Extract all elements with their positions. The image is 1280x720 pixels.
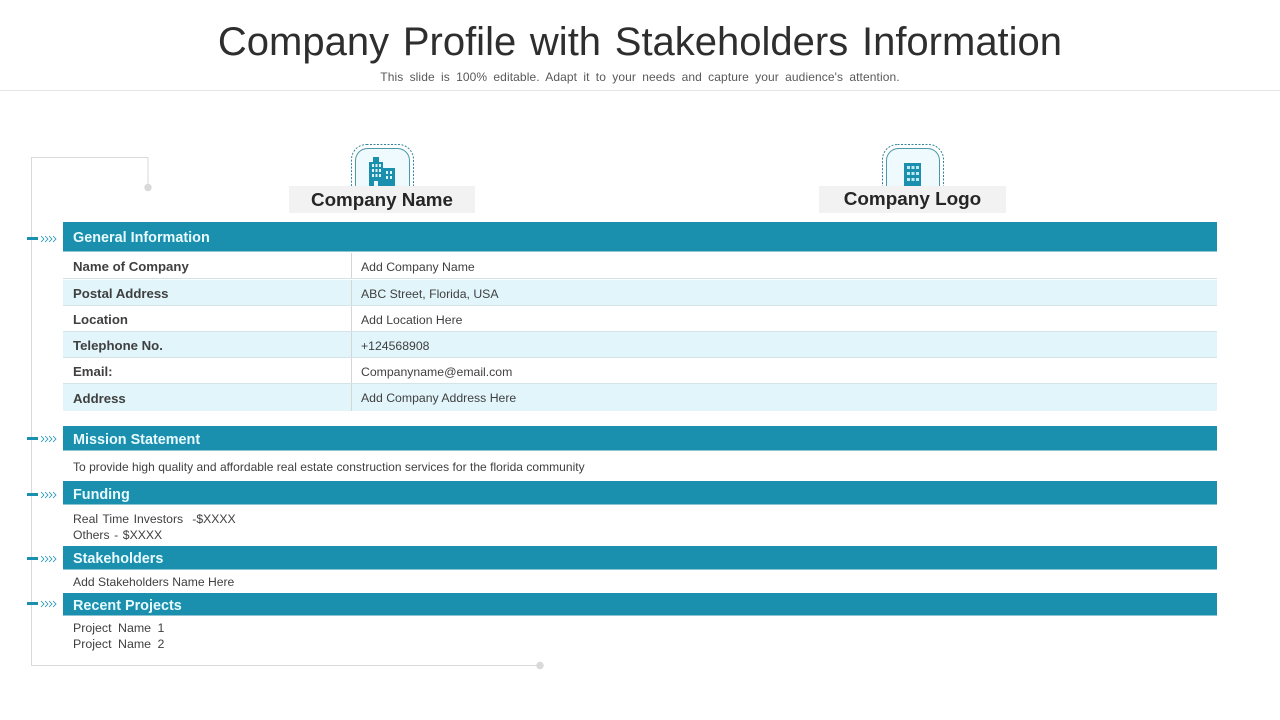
row: email: Companyname@email.com — [361, 365, 512, 379]
section header: funding — [63, 481, 1217, 505]
funding text: Real Time Investors -$XXXX — [73, 512, 236, 526]
recent projects text — [73, 621, 164, 651]
section header: stakeholders — [63, 546, 1217, 570]
row: email — [63, 358, 1217, 384]
recent projects text: Project Name 1 — [73, 621, 164, 635]
section header: stakeholders: Stakeholders — [73, 551, 163, 567]
marker: mission statement — [27, 436, 56, 442]
recent projects text: Project Name 2 — [73, 637, 164, 651]
section header: general information — [63, 222, 1217, 252]
table: general information — [63, 253, 1217, 411]
section header: recent projects — [63, 593, 1217, 616]
icon: company logo building — [882, 144, 944, 186]
row: telephone — [63, 332, 1217, 358]
company name label: Company Name — [311, 189, 453, 210]
marker: stakeholders — [27, 556, 56, 562]
section header: general information: General Information — [73, 230, 210, 246]
row: location: Location — [73, 312, 128, 327]
subtitle: This slide is 100% editable. Adapt it to your needs and capture your audience's attention. — [380, 70, 900, 84]
row: telephone: Telephone No. — [73, 338, 163, 353]
row: location — [63, 306, 1217, 332]
company name label — [289, 186, 475, 213]
row: name of company: Name of Company — [73, 259, 189, 274]
stakeholders text: Add Stakeholders Name Here — [73, 575, 234, 589]
row: telephone: +124568908 — [361, 339, 429, 353]
section header: funding: Funding — [73, 487, 130, 503]
mission text: To provide high quality and affordable real estate construction services for the florida community — [73, 460, 585, 474]
company logo label: Company Logo — [844, 189, 981, 210]
marker: funding — [27, 492, 56, 498]
row: postal address — [63, 280, 1217, 306]
row: address — [63, 384, 1217, 411]
section header: mission statement: Mission Statement — [73, 432, 200, 448]
row: name of company — [63, 253, 1217, 279]
section header: recent projects: Recent Projects — [73, 598, 182, 614]
row: name of company: Add Company Name — [361, 260, 475, 274]
row: postal address: Postal Address — [73, 286, 169, 301]
row: location: Add Location Here — [361, 313, 462, 327]
funding text — [73, 512, 236, 542]
funding text: Others - $XXXX — [73, 528, 162, 542]
row: address: Add Company Address Here — [361, 391, 516, 405]
row: postal address: ABC Street, Florida, USA — [361, 287, 499, 301]
title: Company Profile with Stakeholders Information — [218, 20, 1062, 64]
marker: recent projects — [27, 600, 56, 608]
icon: company name buildings — [351, 144, 414, 186]
section header: mission statement — [63, 426, 1217, 451]
row: email: Email: — [73, 364, 113, 379]
row: address: Address — [73, 391, 126, 406]
marker: general information — [27, 236, 56, 242]
company logo label — [819, 186, 1006, 213]
